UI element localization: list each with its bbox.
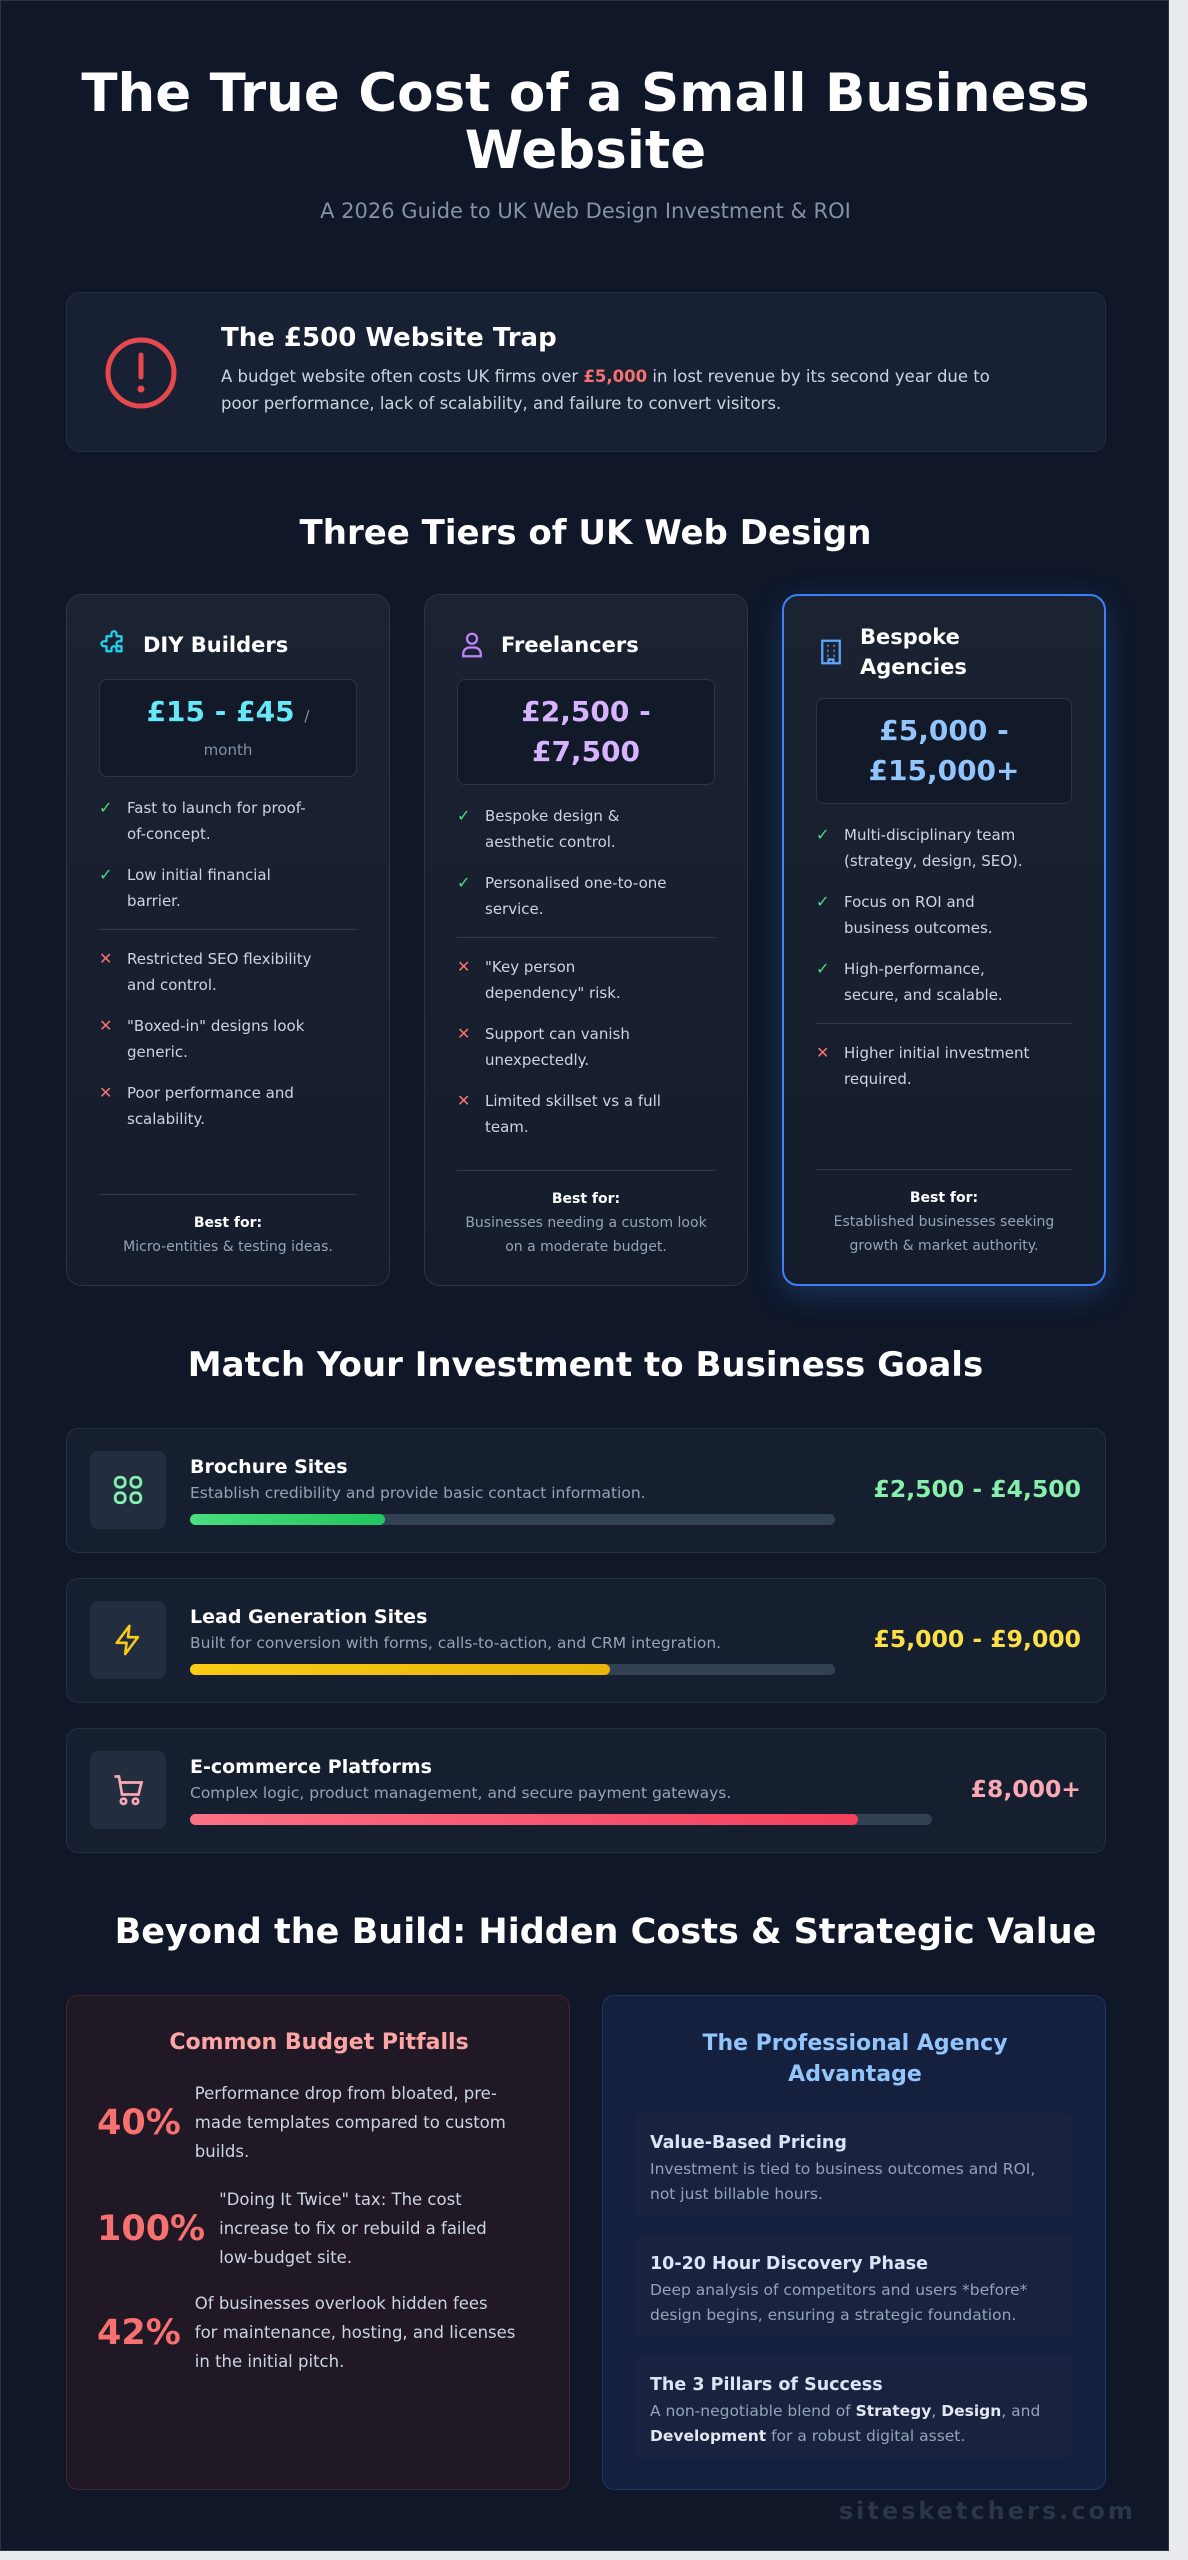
three pillars: A non-negotiable blend of Strategy, Design, and Development for a robust digital asset. xyxy=(650,2402,1040,2445)
stat: 42%: 42% xyxy=(97,2312,181,2352)
panel: common budget pitfalls: Common Budget Pitfalls xyxy=(169,2030,469,2055)
panel: bespoke agencies: Best for: xyxy=(910,1190,978,1206)
panel: e-commerce: E-commerce Platforms xyxy=(190,1756,432,1778)
panel: freelancers: Businesses needing a custom look on a moderate budget. xyxy=(465,1215,707,1255)
panel: lead generation: £5,000 - £9,000 xyxy=(874,1625,1081,1653)
icon: alert xyxy=(106,338,176,408)
panel: DIY builders: Micro-entities & testing ideas. xyxy=(123,1239,333,1255)
panel: DIY builders: Best for: xyxy=(194,1215,262,1231)
panel: bespoke agencies xyxy=(782,594,1106,1286)
panel: DIY builders: ✕ xyxy=(99,1016,112,1035)
panel: freelancers: Freelancers xyxy=(501,633,639,657)
panel: bespoke agencies: £5,000 - xyxy=(879,714,1009,747)
panel: DIY builders xyxy=(66,594,390,1286)
panel: freelancers: £7,500 xyxy=(532,735,640,768)
title xyxy=(81,63,1090,181)
panel: e-commerce xyxy=(66,1728,1106,1853)
panel: bespoke agencies: Multi-disciplinary team (strategy, design, SEO). xyxy=(844,826,1023,870)
panel: freelancers: ✓ xyxy=(457,806,470,825)
panel: common budget pitfalls xyxy=(66,1995,570,2490)
panel: freelancers: "Key person dependency" risk. xyxy=(485,958,621,1002)
panel: professional agency advantage: Advantage xyxy=(788,2062,922,2087)
stat: 100%: "Doing It Twice" tax: The cost increase to fix or rebuild a failed low-budget site. xyxy=(219,2190,487,2267)
panel: freelancers: Best for: xyxy=(552,1191,620,1207)
stat: 42% xyxy=(97,2294,515,2371)
panel: DIY builders: Low initial financial barrier. xyxy=(127,866,271,910)
value-based pricing: Investment is tied to business outcomes and ROI, not just billable hours. xyxy=(650,2160,1035,2203)
panel: freelancers: ✕ xyxy=(457,1091,470,1110)
panel: DIY builders: ✓ xyxy=(99,798,112,817)
panel: bespoke agencies: £15,000+ xyxy=(868,754,1020,787)
discovery phase: Deep analysis of competitors and users *before* design begins, ensuring a strategic foundation. xyxy=(650,2281,1027,2324)
panel: brochure sites xyxy=(66,1428,1106,1553)
icon: bolt xyxy=(90,1601,166,1679)
subtitle: A 2026 Guide to UK Web Design Investment & ROI xyxy=(320,199,851,223)
panel: lead generation: Lead Generation Sites xyxy=(190,1606,427,1628)
stat: 100% xyxy=(97,2190,487,2267)
panel: freelancers: £2,500 - xyxy=(521,695,651,728)
panel: freelancers xyxy=(424,594,748,1286)
panel: brochure sites: Establish credibility and provide basic contact information. xyxy=(190,1484,646,1502)
panel: bespoke agencies: Agencies xyxy=(860,655,967,679)
panel: brochure sites: £2,500 - £4,500 xyxy=(874,1475,1081,1503)
panel: DIY builders: ✓ xyxy=(99,865,112,884)
panel: e-commerce: £8,000+ xyxy=(971,1775,1081,1803)
panel: DIY builders: DIY Builders xyxy=(143,633,288,657)
panel: DIY builders: ✕ xyxy=(99,949,112,968)
callout text: The £500 Website Trap xyxy=(221,323,557,353)
panel: bespoke agencies: Higher initial investment required. xyxy=(844,1044,1029,1088)
stat: 42%: for maintenance, hosting, and licenses xyxy=(195,2323,515,2342)
value-based pricing xyxy=(635,2113,1072,2216)
panel: freelancers: ✕ xyxy=(457,957,470,976)
heading: beyond the build: Beyond the Build: Hidden Costs & Strategic Value xyxy=(115,1912,1096,1952)
title: The True Cost of a Small Business xyxy=(81,63,1090,124)
discovery phase: 10-20 Hour Discovery Phase xyxy=(650,2254,928,2274)
panel: DIY builders: "Boxed-in" designs look generic. xyxy=(127,1017,304,1061)
panel: bespoke agencies: Focus on ROI and business outcomes. xyxy=(844,893,993,937)
watermark: sitesketchers.com xyxy=(839,2497,1136,2525)
three pillars xyxy=(635,2355,1072,2458)
panel: freelancers: ✕ xyxy=(457,1024,470,1043)
panel: bespoke agencies: Established businesses seeking growth & market authority. xyxy=(834,1214,1054,1254)
panel: bespoke agencies: ✓ xyxy=(816,959,829,978)
stat: 40%: Performance drop from bloated, pre-made templates compared to custom builds. xyxy=(195,2084,506,2161)
icon: cart xyxy=(90,1751,166,1829)
panel: freelancers: Bespoke design & aesthetic control. xyxy=(485,807,619,851)
panel: lead generation: Built for conversion with forms, calls-to-action, and CRM integration. xyxy=(190,1634,721,1652)
panel: bespoke agencies: ✓ xyxy=(816,892,829,911)
callout text: A budget website often costs UK firms over £5,000 in lost revenue by its second year due to xyxy=(221,367,990,386)
panel: e-commerce: Complex logic, product management, and secure payment gateways. xyxy=(190,1784,731,1802)
panel: bespoke agencies: ✓ xyxy=(816,825,829,844)
panel: DIY builders: month xyxy=(204,741,252,759)
title: Website xyxy=(465,120,706,181)
heading: three tiers: Three Tiers of UK Web Design xyxy=(300,513,871,553)
three pillars: The 3 Pillars of Success xyxy=(650,2375,883,2395)
panel: brochure sites: Brochure Sites xyxy=(190,1456,348,1478)
panel: freelancers: Limited skillset vs a full team. xyxy=(485,1092,661,1136)
panel: bespoke agencies: High-performance, secure, and scalable. xyxy=(844,960,1003,1004)
panel: DIY builders: ✕ xyxy=(99,1083,112,1102)
stat: 42%: Of businesses overlook hidden fees xyxy=(195,2294,488,2313)
icon: grid xyxy=(90,1451,166,1529)
panel: DIY builders: Restricted SEO flexibility and control. xyxy=(127,950,311,994)
panel: bespoke agencies: Bespoke xyxy=(860,625,960,649)
callout text xyxy=(221,323,990,413)
panel: lead generation xyxy=(66,1578,1106,1703)
value-based pricing: Value-Based Pricing xyxy=(650,2133,847,2153)
panel: freelancers: ✓ xyxy=(457,873,470,892)
panel: DIY builders: Fast to launch for proof-of-concept. xyxy=(127,799,306,843)
heading: match investment: Match Your Investment to Business Goals xyxy=(188,1345,983,1385)
panel: professional agency advantage: The Professional Agency xyxy=(702,2031,1008,2056)
callout text: poor performance, lack of scalability, and failure to convert visitors. xyxy=(221,394,781,413)
panel: DIY builders: £15 - £45 / xyxy=(147,695,309,728)
stat: 100%: 100% xyxy=(97,2208,205,2248)
callout: £500 trap xyxy=(66,292,1106,452)
panel: freelancers: Personalised one-to-one service. xyxy=(485,874,667,918)
panel: professional agency advantage xyxy=(602,1995,1106,2490)
stat: 40%: 40% xyxy=(97,2102,181,2142)
panel: bespoke agencies: ✕ xyxy=(816,1043,829,1062)
panel: DIY builders: Poor performance and scalability. xyxy=(127,1084,294,1128)
discovery phase xyxy=(635,2234,1072,2337)
stat: 42%: in the initial pitch. xyxy=(195,2352,344,2371)
panel: freelancers: Support can vanish unexpectedly. xyxy=(485,1025,630,1069)
